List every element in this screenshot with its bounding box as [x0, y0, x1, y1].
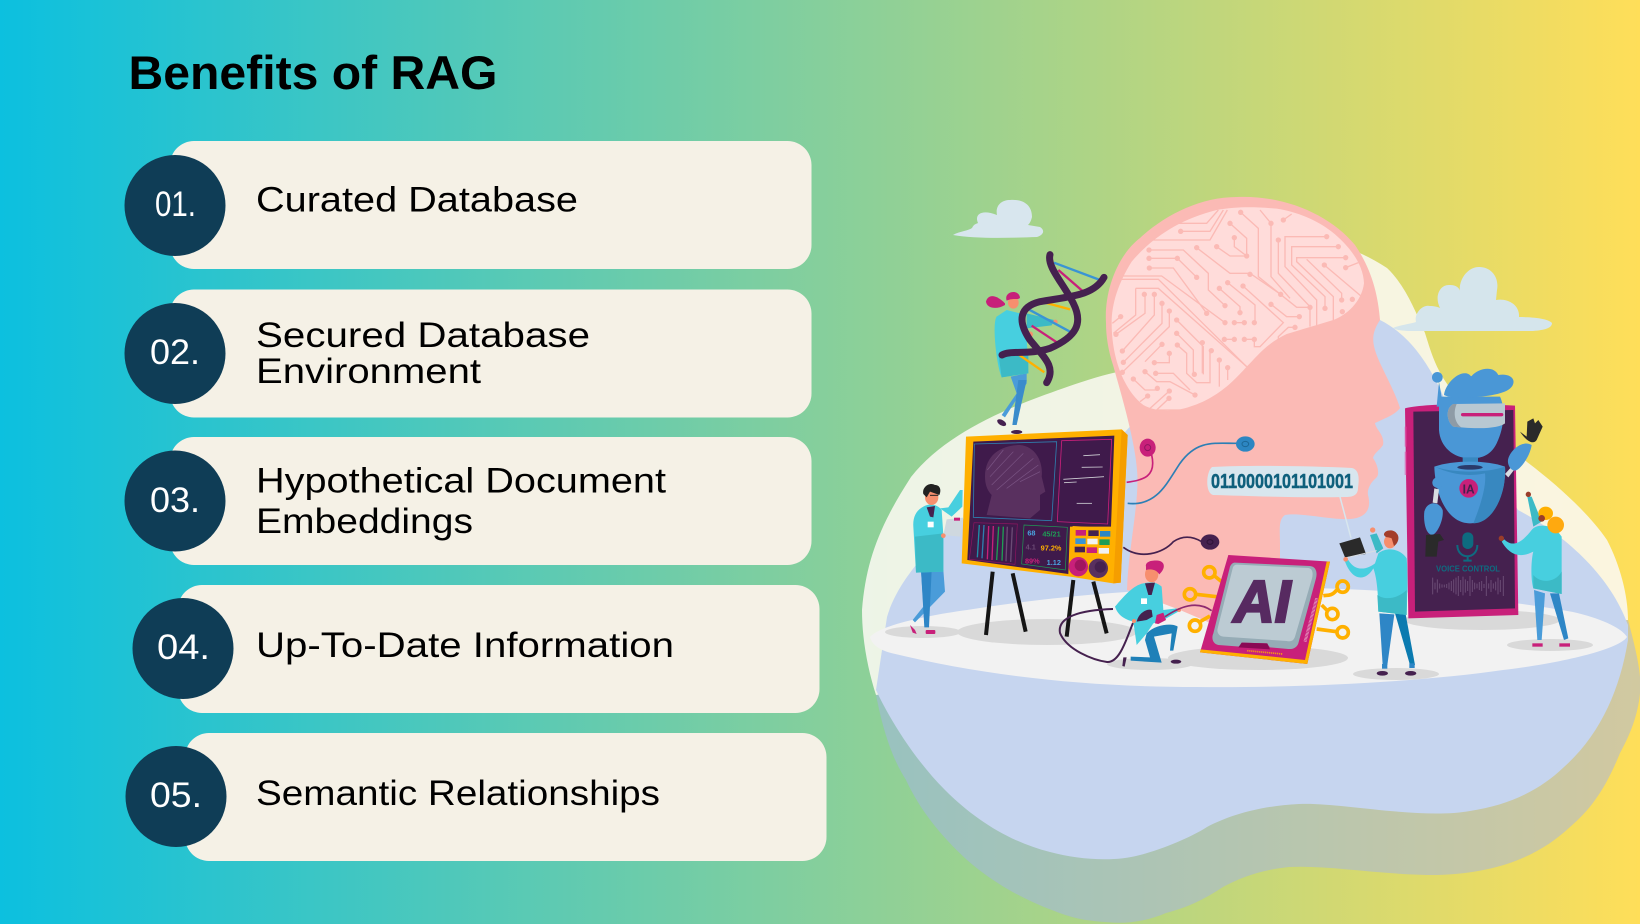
panel: item 02	[124, 290, 812, 418]
cable: pink connector	[1127, 439, 1156, 482]
cloud left	[953, 200, 1043, 238]
panel: item 01: Curated Database	[256, 180, 578, 220]
monitor on easel: 1.12	[1047, 558, 1061, 567]
panel: item 03: Hypothetical Document	[256, 462, 666, 500]
robot on phone: IA	[1463, 482, 1475, 497]
panel: item 05: 05.	[150, 776, 202, 815]
panel: item 02: Environment	[256, 352, 481, 391]
binary code label: 0110000101101001	[1211, 471, 1353, 493]
monitor on easel	[962, 429, 1128, 637]
panel: item 03	[124, 437, 812, 565]
scientist pointing at phone	[1499, 492, 1570, 647]
monitor on easel: 97.2%	[1041, 543, 1062, 552]
panel: item 05	[126, 733, 826, 861]
head silhouette	[1106, 197, 1400, 625]
AI chip: AI	[1231, 568, 1292, 635]
scientist with DNA helix	[986, 255, 1104, 434]
monitor on easel: 4.1	[1026, 542, 1036, 551]
panel: item 02: Secured Database	[256, 316, 590, 355]
illustration: backdrop blobs	[862, 240, 1640, 923]
panel: item 04: Up-To-Date Information	[256, 626, 674, 665]
platform	[870, 587, 1627, 687]
scientist kneeling with plugs	[1115, 561, 1212, 667]
panel: item 03: 03.	[150, 481, 200, 520]
binary code label	[1207, 466, 1359, 538]
monitor on easel: 68	[1027, 529, 1035, 538]
panel: item 05: Semantic Relationships	[256, 774, 660, 813]
panel: item 01	[124, 141, 812, 269]
brain circuit	[1112, 207, 1364, 411]
panel: item 04	[132, 585, 820, 713]
cloud right	[1393, 267, 1552, 331]
ground shadows	[885, 610, 1593, 680]
panel: item 01: 01.	[155, 185, 196, 224]
robot on phone: VOICE CONTROL	[1436, 563, 1500, 573]
robot on phone	[1405, 369, 1543, 618]
panel: item 02: 02.	[150, 333, 200, 372]
scientist with clipboard	[910, 484, 963, 634]
scientist with laptop	[1339, 527, 1416, 676]
monitor on easel: 89%	[1025, 556, 1040, 565]
title: Benefits of RAG	[128, 46, 497, 99]
AI chip	[1184, 555, 1348, 664]
cable: purple connector	[1123, 534, 1219, 554]
panel: item 03: Embeddings	[256, 502, 473, 541]
monitor on easel: 45/21	[1042, 530, 1061, 539]
purple plug cable	[1060, 609, 1133, 662]
cable: blue connector	[1128, 436, 1255, 504]
panel: item 04: 04.	[157, 628, 210, 667]
